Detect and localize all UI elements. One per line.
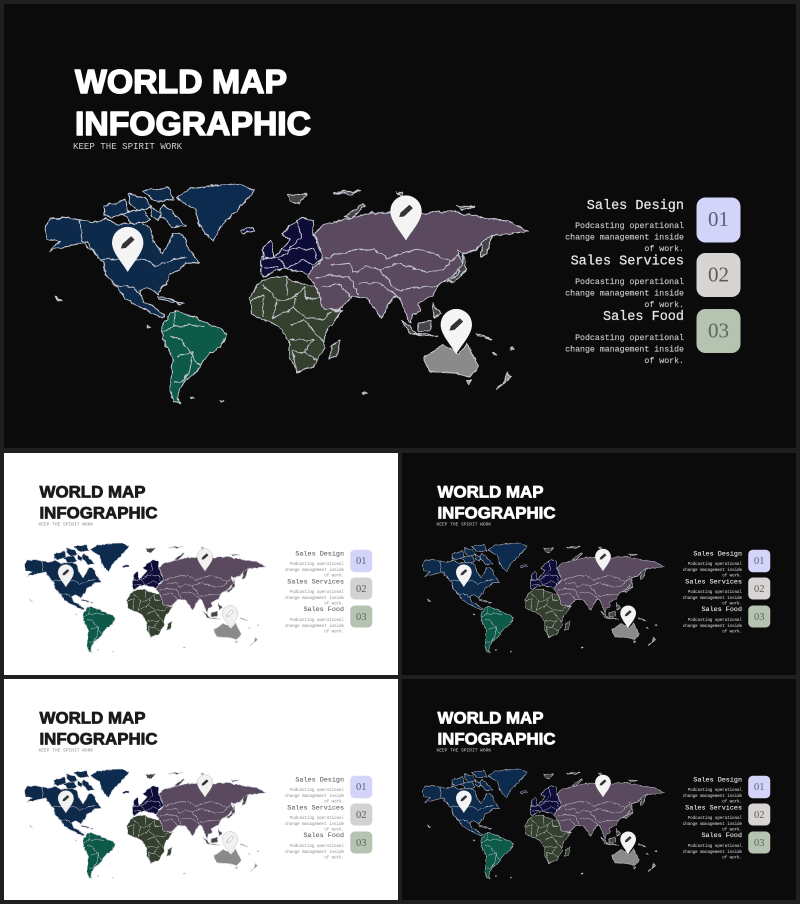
legend item 3: Podcasting operational [575,333,684,343]
legend: 03 [356,612,366,623]
legend item 2: change management inside [565,288,684,298]
legend: change management inside [683,568,743,573]
world map [422,543,664,652]
region: Africa [249,277,342,372]
legend: of work. [722,630,742,634]
slide content [422,710,770,878]
region: Australia [423,343,478,384]
map pin: Australia [441,309,472,354]
legend: Sales Services [685,578,742,586]
map pins [58,775,238,854]
legend: change management inside [285,568,345,573]
legend: of work. [722,856,742,860]
legend: of work. [324,828,344,832]
legend: change management inside [683,596,743,601]
legend: Podcasting operational [290,844,345,849]
legend [683,550,770,634]
legend: change management inside [285,596,345,601]
legend: change management inside [285,624,345,629]
slide content [422,484,770,652]
legend item 1: change management inside [565,232,684,242]
panel: dark slide, top right [402,453,796,675]
region: Greenland [177,184,255,241]
legend item 1 [565,198,740,254]
legend: 03 [754,838,764,849]
slide content [24,484,372,652]
world map [45,184,528,403]
legend [683,776,770,860]
legend: 03 [356,838,366,849]
legend: of work. [722,602,742,606]
title [40,710,158,748]
legend item 1: of work. [644,244,684,254]
legend: Podcasting operational [290,562,345,567]
subtitle: KEEP THE SPIRIT WORK [38,522,93,528]
world map [422,769,664,878]
title [40,484,158,522]
legend: 02 [754,584,764,595]
panel: white slide, top left [4,453,398,675]
slide content [24,710,372,878]
subtitle: KEEP THE SPIRIT WORK [436,748,491,754]
panel: white slide, bottom left [4,679,398,900]
legend: Podcasting operational [688,590,743,595]
legend: 01 [356,782,366,793]
legend: change management inside [683,850,743,855]
world map [24,543,266,652]
region: North America [45,187,200,318]
title: INFOGRAPHIC [40,730,158,748]
legend: Sales Services [287,804,344,812]
legend: Sales Food [303,606,344,614]
title: WORLD MAP [438,484,544,502]
legend item 3: change management inside [565,344,684,354]
legend item 1: Sales Design [587,199,684,214]
legend item 2: of work. [644,300,684,310]
legend: Sales Design [693,776,742,784]
legend: change management inside [285,822,345,827]
legend: of work. [324,856,344,860]
legend: of work. [324,602,344,606]
legend: 03 [754,612,764,623]
legend: change management inside [683,794,743,799]
legend: Sales Food [701,606,742,614]
legend item 3: Sales Food [603,310,684,325]
subtitle: KEEP THE SPIRIT WORK [436,522,491,528]
legend: of work. [324,574,344,578]
map pin: North America [112,227,143,272]
region: South America [162,311,227,402]
title [438,484,556,522]
legend: of work. [324,630,344,634]
title: WORLD MAP [40,710,146,728]
slide background [4,679,398,900]
legend item 3: 03 [708,318,729,342]
legend item 2: Podcasting operational [575,277,684,287]
legend: Podcasting operational [688,816,743,821]
legend: Podcasting operational [290,788,345,793]
legend: Podcasting operational [688,562,743,567]
legend: change management inside [683,822,743,827]
legend: Sales Food [303,832,344,840]
map pins [58,549,238,628]
legend: Podcasting operational [290,590,345,595]
legend: of work. [722,800,742,804]
subtitle: KEEP THE SPIRIT WORK [73,141,183,152]
slide background [402,453,796,675]
panel: dark slide, bottom right [402,679,796,900]
subtitle: KEEP THE SPIRIT WORK [38,748,93,754]
legend [285,550,372,634]
legend: Sales Services [685,804,742,812]
legend: Podcasting operational [688,844,743,849]
map pin: Russia [390,195,422,240]
slide background [4,453,398,675]
panel: main dark slide [4,4,796,448]
title: INFOGRAPHIC [438,504,556,522]
legend [285,776,372,860]
region: Asian islands [55,191,514,403]
world map [24,769,266,878]
legend: change management inside [683,624,743,629]
legend: Sales Design [295,776,344,784]
legend: Podcasting operational [688,788,743,793]
legend: of work. [722,828,742,832]
legend: change management inside [285,850,345,855]
legend: of work. [722,574,742,578]
legend: Podcasting operational [688,618,743,623]
title: INFOGRAPHIC [438,730,556,748]
legend: Podcasting operational [290,618,345,623]
map pins [456,775,636,854]
legend: 01 [754,782,764,793]
legend item 2: 02 [708,262,729,286]
title: WORLD MAP [438,710,544,728]
legend: 01 [754,556,764,567]
legend item 2 [565,253,740,310]
legend: Sales Food [701,832,742,840]
legend: 02 [754,810,764,821]
title: WORLD MAP [40,484,146,502]
title: WORLD MAP [75,63,287,100]
legend: 02 [356,810,366,821]
legend item 3 [565,309,740,366]
title: INFOGRAPHIC [75,105,311,142]
slide background [4,4,796,448]
legend: Sales Design [295,550,344,558]
slide background [402,679,796,900]
title [438,710,556,748]
legend: Sales Design [693,550,742,558]
legend: Podcasting operational [290,816,345,821]
region: Asia and Russia [308,212,528,323]
legend: Sales Services [287,578,344,586]
legend: 02 [356,584,366,595]
legend item 1: 01 [708,207,729,231]
legend: of work. [324,800,344,804]
title [75,63,311,142]
legend item 3: of work. [644,356,684,366]
region: Europe [242,218,325,277]
legend: 01 [356,556,366,567]
legend item 1: Podcasting operational [575,221,684,231]
title: INFOGRAPHIC [40,504,158,522]
legend item 2: Sales Services [571,254,684,270]
map pins [456,549,636,628]
legend: change management inside [285,794,345,799]
